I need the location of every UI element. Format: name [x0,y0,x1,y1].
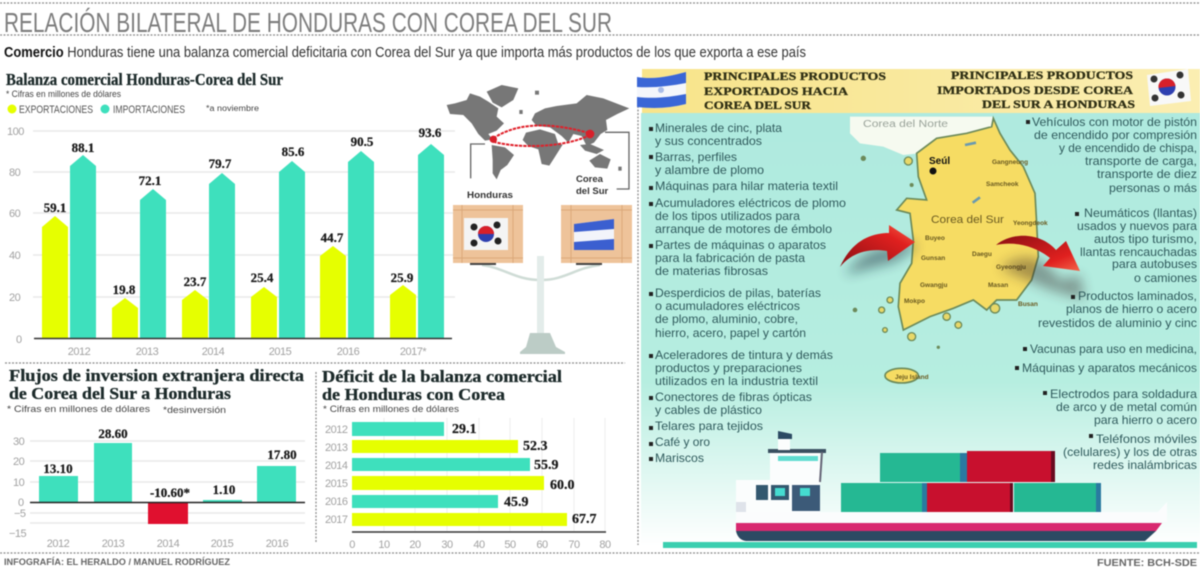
list: imported products: personas o más [1109,181,1197,195]
map labels: Corea del Sur [931,214,1004,226]
list: exported products: Máquinas para hilar materia textil [655,179,838,193]
legend: *a noviembre [206,104,260,113]
list: exported products: productos y preparaciones [655,361,802,375]
note: * Cifras en millones de dólares [6,89,121,100]
list: imported products: o camiones [1134,271,1197,285]
list: exported products: Aceleradores de tintura y demás [655,348,833,362]
map labels: Busan [1018,301,1038,308]
list: exported products [649,121,846,465]
list: imported products: transporte de carga, [1085,154,1197,168]
heading: exports: COREA DEL SUR [704,98,811,112]
map labels: Jeju Island [895,374,929,381]
note: * Cifras en millones de dólares [7,404,150,415]
bar values: 28.60 [98,426,128,441]
axis labels [9,436,27,540]
bar values: 25.9 [391,270,414,285]
list: exported products: Partes de máquinas o aparatos [655,238,826,252]
bar values: 19.8 [113,282,136,297]
panel: trade deficit chart: de Honduras con Corea [322,385,506,404]
panel: investment flows chart: de Corea del Sur a Honduras [9,384,231,403]
bar values: 85.6 [282,144,305,159]
list: exported products: y sus concentrados [655,134,762,148]
note: * Cifras en millones de dólares [323,404,459,415]
import bars [70,144,444,338]
bar values: 93.6 [419,125,442,140]
list: exported products: Mariscos [655,451,704,465]
year labels: 2012 [325,424,348,436]
bar values [452,422,596,527]
list: imported products: Vacunas para uso en medicina, [1030,342,1197,356]
panel: investment flows chart [7,366,305,550]
year labels [68,346,427,358]
list: exported products: Minerales de cinc, plata [655,121,782,135]
bar values: 45.9 [504,495,528,510]
heading: imports: PRINCIPALES PRODUCTOS [951,68,1133,82]
axis labels: 20 [13,456,25,468]
list: exported products: Café y oro [655,435,710,449]
cargo ship [663,431,1197,548]
year labels: 2012 [68,346,91,358]
heading: exports: EXPORTADOS HACIA [704,84,848,98]
map labels: Yeongdeok [1013,220,1048,227]
map labels: Daegu [972,251,992,258]
heading: imports: IMPORTADOS DESDE COREA [937,83,1133,97]
label Corea del Sur: del Sur [576,186,609,197]
year labels: 2017* [400,346,427,358]
city: Seúl [929,156,950,174]
bar values: 88.1 [72,140,94,155]
bar values: 23.7 [184,274,207,289]
investment bars [39,443,296,524]
list: imported products: transporte de diez [1097,167,1197,181]
x axis labels: 80 [599,539,611,551]
bar values: 55.9 [534,458,558,473]
list: imported products: y de encendido de chispa, [1059,141,1197,155]
heading: imports [937,68,1135,111]
label Honduras: Honduras [467,190,513,200]
year labels: 2013 [325,442,348,454]
bar values: 90.5 [351,134,374,149]
list: imported products: de arco y de metal común [1056,400,1197,414]
year labels: 2014 [157,538,180,550]
x axis labels: 70 [568,539,580,551]
map labels: Gyeongju [996,264,1026,271]
map labels: Gangneung [992,159,1028,166]
label Corea del Sur: Corea [576,174,603,185]
y axis labels: 100 [7,126,24,138]
year labels: 2016 [337,346,360,358]
panel: products and map [637,68,1200,548]
deficit bars [352,422,567,526]
axis labels: 30 [13,436,25,448]
list: exported products: y cables de plástico [655,403,762,417]
x axis labels: 20 [409,539,421,551]
bar values: 25.4 [251,270,274,285]
axis labels: 10 [13,477,25,489]
ship superstructure [736,431,826,513]
containers [841,451,1101,512]
list: exported products: Conectores de fibras ópticas [655,390,812,404]
icon: South Korea flag [1147,69,1191,106]
map labels: Gwangju [920,282,947,289]
legend: EXPORTACIONES [19,104,93,116]
panel: investment flows chart: *desinversión [163,405,226,416]
icon: Honduras flag [637,72,686,108]
box with Korean flag [453,205,523,263]
credit: INFOGRAFÍA: EL HERALDO / MANUEL RODRÍGUEZ [4,557,230,568]
bar values: -10.60* [150,485,190,500]
year labels: 2015 [211,538,234,550]
water [663,542,1197,548]
source: FUENTE: BCH-SDE [1097,557,1197,569]
y axis labels: 80 [9,167,21,179]
bar values [43,426,297,500]
list: exported products: o acumuladores eléctricos [655,299,800,313]
y axis labels [7,126,24,346]
arrow: exports into Korea [840,225,918,275]
legend: IMPORTACIONES [113,104,185,116]
x axis labels: 50 [504,539,516,551]
arrow: imports from Korea [996,236,1085,300]
axis labels: −5 [14,508,26,520]
map of Korea [850,117,1048,383]
header band [642,69,1200,113]
map labels: Buyeo [925,235,945,242]
axis labels: −15 [9,528,27,540]
list: imported products: redes inalámbricas [1093,458,1197,472]
panel: trade deficit chart [322,367,611,551]
x axis labels: 30 [441,539,453,551]
city: Seúl: Seúl [929,156,950,167]
list: exported products: para la fabricación de pasta [655,251,805,265]
legend [8,104,260,116]
bar values: 67.7 [572,512,596,527]
list: exported products: de materias fibrosas [655,264,768,278]
axis labels: 0 [18,497,24,509]
year labels: 2015 [325,478,348,490]
year labels: 2013 [102,538,125,550]
box with Honduran flag [561,205,632,263]
heading: exports: PRINCIPALES PRODUCTOS [704,69,886,83]
list: exported products: de los tipos utilizados para [655,209,800,223]
heading: Balanza comercial Honduras-Corea del Sur [6,70,283,89]
x axis labels: 40 [473,539,485,551]
map labels: Gunsan [921,255,945,262]
year labels [47,538,289,550]
bar values: 60.0 [550,478,574,493]
bar values [44,125,442,297]
year labels: 2017 [325,514,348,526]
list: imported products: Productos laminados, [1078,289,1197,303]
year labels: 2014 [325,460,348,472]
list: imported products: Teléfonos móviles [1096,432,1197,446]
list: exported products: y alambre de plomo [655,163,764,177]
bar values: 13.10 [43,461,73,476]
list: imported products: de encendido por compresión [1034,128,1197,142]
bar values: 44.7 [321,230,344,245]
list: imported products: usados y nuevos para [1077,219,1197,233]
list: imported products: autos tipo turismo, [1094,232,1197,246]
map labels: Corea del Norte [863,119,949,130]
list: imported products [1015,115,1197,472]
bar values: 1.10 [213,482,235,497]
bar values: 59.1 [44,200,66,215]
list: imported products: (celulares) y los de otras [1063,445,1197,459]
year labels: 2016 [325,496,348,508]
heading: Déficit de la balanza comercial [322,367,562,386]
year labels: 2014 [202,346,225,358]
year labels: 2015 [269,346,292,358]
list: exported products: Barras, perfiles [655,150,737,164]
list: exported products: arranque de motores de émbolo [655,222,832,236]
list: imported products: planos de hierro o acero [1066,302,1197,316]
list: exported products: Desperdicios de pilas, baterías [655,286,821,300]
heading: exports [704,69,886,112]
map labels: Masan [988,282,1008,289]
list: imported products: Neumáticos (llantas) [1084,206,1197,220]
y axis labels: 60 [9,208,21,220]
bar values: 17.80 [267,447,297,462]
panel: trade balance chart [6,70,455,358]
bar values: 72.1 [139,173,161,188]
bar values: 79.7 [209,156,232,171]
list: imported products: para hierro o acero [1094,413,1197,427]
list: imported products: para autobuses [1112,257,1197,271]
year labels: 2012 [47,538,70,550]
bar values: 52.3 [523,439,548,454]
list: imported products: Vehículos con motor de pistón [1032,115,1197,129]
list: exported products: Acumuladores eléctricos de plomo [655,196,846,210]
heading: imports: DEL SUR A HONDURAS [982,97,1135,111]
list: imported products: Electrodos para soldadura [1050,387,1197,401]
hull [736,502,1167,541]
map labels: Mokpo [904,298,925,305]
list: exported products: hierro, acero, papel y cartón [655,326,806,340]
x axis labels [349,539,611,551]
title: RELACIÓN BILATERAL DE HONDURAS CON COREA DEL SUR [4,7,612,38]
intro sentence: Comercio Honduras tiene una balanza comercial deficitaria con Corea del Sur ya que importa más productos de los que exporta a ese país [4,45,806,61]
list: exported products: de plomo, aluminio, cobre, [655,312,798,326]
list: imported products: Máquinas y aparatos mecánicos [1022,361,1197,375]
world map with trade route [447,85,629,200]
list: imported products: revestidos de aluminio y cinc [1038,316,1197,330]
x axis labels: 10 [378,539,390,551]
year labels: 2013 [136,346,159,358]
list: exported products: Telares para tejidos [655,419,763,433]
scale stand [470,256,602,354]
list: imported products: llantas rencauchadas [1080,245,1197,259]
y axis labels: 0 [16,334,22,346]
scale with flag boxes [453,205,632,354]
x axis labels: 0 [349,539,355,551]
x axis labels: 60 [536,539,548,551]
heading: Flujos de inversion extranjera directa [9,366,305,385]
list: exported products: utilizados en la industria textil [655,374,818,388]
y axis labels: 20 [9,292,21,304]
export bars [42,216,416,338]
map labels: Samcheok [986,181,1019,188]
map labels [863,119,1048,381]
year labels [325,424,348,526]
bar values: 29.1 [452,422,476,437]
y axis labels: 40 [9,250,21,262]
year labels: 2016 [266,538,289,550]
